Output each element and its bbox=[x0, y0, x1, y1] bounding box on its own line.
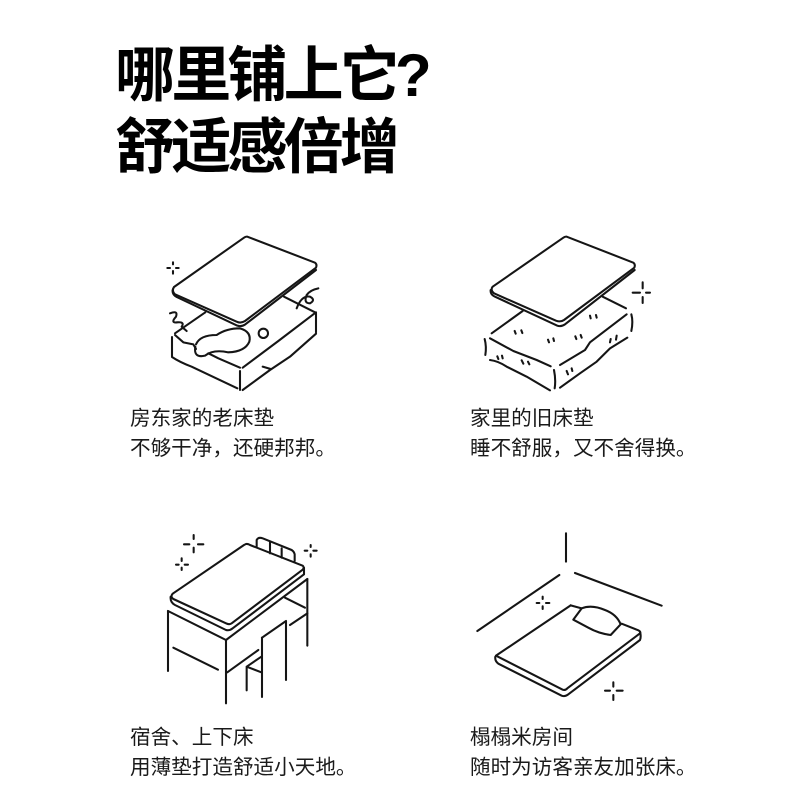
sparkle bbox=[633, 282, 650, 303]
icon: mattress on old home mattress bbox=[484, 236, 651, 392]
sparkle bbox=[167, 262, 179, 274]
caption: old landlord mattress: 房东家的老床垫 bbox=[130, 407, 274, 430]
icon: mattress on stained old mattress bbox=[166, 236, 320, 392]
title line 2: 舒适感倍增 bbox=[115, 114, 396, 181]
sparkles bbox=[537, 597, 549, 609]
caption: dormitory bunk bed bbox=[130, 726, 357, 779]
caption: old landlord mattress: 不够干净，还硬邦邦。 bbox=[130, 437, 336, 460]
caption: dormitory bunk bed: 用薄垫打造舒适小天地。 bbox=[130, 756, 357, 779]
icon: mattress on dormitory bunk bed bbox=[166, 534, 318, 704]
caption: old landlord mattress bbox=[130, 407, 336, 460]
caption: old home mattress: 家里的旧床垫 bbox=[470, 407, 594, 430]
sparkles bbox=[184, 535, 203, 552]
title line 1: 哪里铺上它? bbox=[115, 42, 432, 109]
caption: tatami room: 榻榻米房间 bbox=[470, 726, 573, 749]
icon: mattress on tatami room floor bbox=[476, 532, 663, 701]
caption: tatami room: 随时为访客亲友加张床。 bbox=[470, 756, 697, 779]
caption: old home mattress bbox=[470, 407, 697, 460]
caption: dormitory bunk bed: 宿舍、上下床 bbox=[130, 726, 254, 749]
caption: old home mattress: 睡不舒服，又不舍得换。 bbox=[470, 437, 697, 460]
title bbox=[115, 42, 432, 181]
caption: tatami room bbox=[470, 726, 697, 779]
